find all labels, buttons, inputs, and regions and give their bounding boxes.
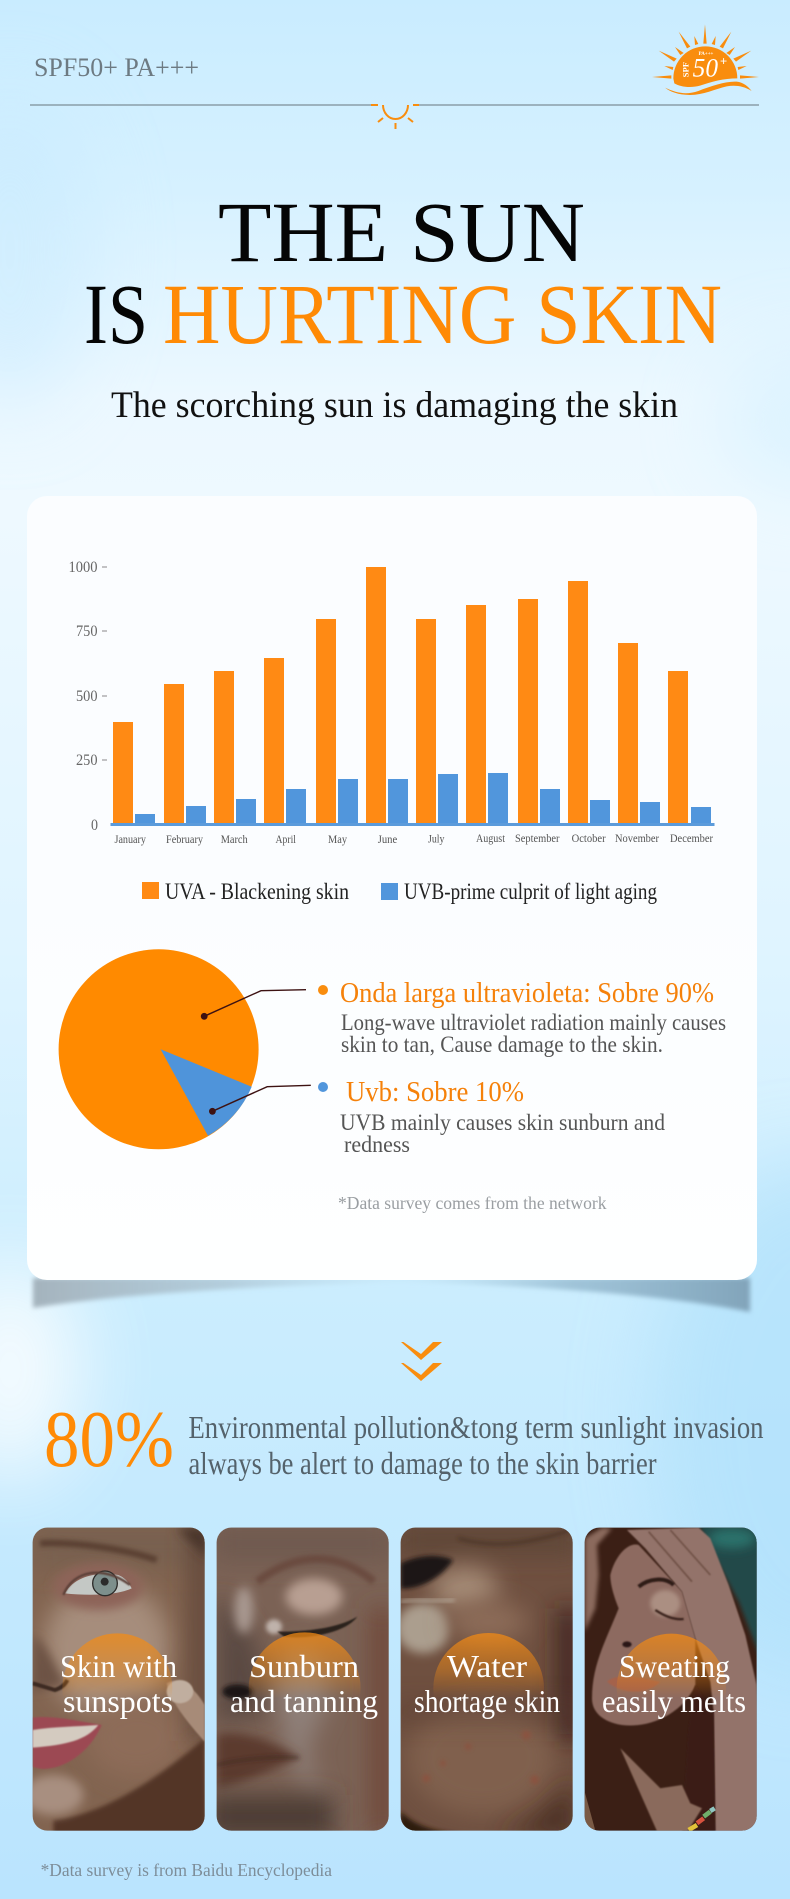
panel: data card [27, 496, 757, 1280]
month labels: July [428, 832, 444, 846]
month labels: November [615, 831, 659, 845]
photo card: sweating easily melts: Sweating [619, 1648, 730, 1684]
photo card: sunburn and tanning [216, 1528, 389, 1831]
photo card: skin with sunspots: Skin with [60, 1648, 177, 1684]
callout: long wave: Onda larga ultravioleta: Sobre 90% [340, 978, 714, 1009]
month labels: August [476, 831, 506, 845]
title [84, 184, 722, 362]
photo card: skin with sunspots: sunspots [63, 1683, 173, 1719]
icon: SPF 50+ sun logo: PA+++ [699, 52, 714, 57]
month labels: January [114, 832, 146, 846]
month labels: February [166, 832, 203, 846]
callout: UVB: Uvb: Sobre 10% [346, 1077, 524, 1108]
UVA bars [113, 567, 688, 824]
month labels: September [515, 831, 560, 845]
callout: long wave: skin to tan, Cause damage to the skin. [341, 1032, 663, 1057]
photo card: water shortage skin: shortage skin [414, 1683, 560, 1719]
photo card: water shortage skin [400, 1528, 573, 1831]
month labels: December [670, 831, 713, 845]
photo card: sunburn and tanning: Sunburn [249, 1648, 359, 1684]
callout: UVB: redness [344, 1132, 410, 1157]
photo card: sweating easily melts [582, 1525, 762, 1835]
subtitle: The scorching sun is damaging the skin [111, 385, 678, 426]
x axis line [110, 823, 714, 826]
leader line: UVA [201, 990, 306, 1020]
y axis labels: 0 [91, 817, 98, 834]
icon: SPF 50+ sun logo [652, 24, 759, 95]
legend: UVA: UVA - Blackening skin [165, 879, 349, 904]
y axis labels: 1000 [68, 559, 98, 576]
title: IS [84, 266, 148, 362]
photo card: sunburn and tanning: and tanning [230, 1683, 378, 1719]
photo card: skin with sunspots [23, 1525, 210, 1835]
callout: UVB: UVB mainly causes skin sunburn and [340, 1110, 665, 1135]
bar chart: monthly UVA and UVB [68, 559, 714, 846]
y axis labels: 750 [76, 623, 98, 640]
footer note: *Data survey is from Baidu Encyclopedia [41, 1860, 332, 1880]
statistic: 80%: 80% [44, 1396, 174, 1484]
month labels: October [572, 831, 606, 845]
title: HURTING SKIN [163, 266, 722, 362]
UVB bars [135, 773, 711, 824]
callout: long wave [318, 978, 726, 1057]
callout: long wave: Long-wave ultraviolet radiation mainly causes [341, 1010, 726, 1035]
statistic description [188, 1409, 764, 1481]
callout: UVB [318, 1077, 665, 1157]
leader line: UVB [209, 1085, 311, 1115]
month labels: May [328, 832, 347, 846]
photo card: water shortage skin: Water [447, 1648, 527, 1684]
month labels [114, 831, 713, 846]
y axis labels [68, 559, 107, 834]
title: THE SUN [218, 184, 585, 280]
card shadow [33, 1278, 750, 1312]
y axis labels: 500 [76, 688, 98, 705]
legend: UVB: UVB-prime culprit of light aging [404, 879, 657, 904]
photo card: sweating easily melts: easily melts [602, 1683, 746, 1719]
source note: *Data survey comes from the network [338, 1193, 606, 1213]
month labels: March [221, 832, 248, 846]
statistic description: always be alert to damage to the skin barrier [188, 1445, 657, 1481]
icon: SPF 50+ sun logo: SPF [681, 62, 691, 77]
month labels: June [378, 832, 397, 846]
icon: double chevron arrow [401, 1342, 442, 1381]
header label: SPF50+ PA+++: SPF50+ PA+++ [34, 53, 199, 82]
month labels: April [276, 832, 297, 846]
icon: SPF 50+ sun logo: 50 [693, 54, 718, 83]
y axis labels: 250 [76, 752, 98, 769]
header divider with half sun [30, 105, 759, 129]
pie chart [59, 949, 311, 1149]
icon: SPF 50+ sun logo: + [720, 55, 727, 69]
